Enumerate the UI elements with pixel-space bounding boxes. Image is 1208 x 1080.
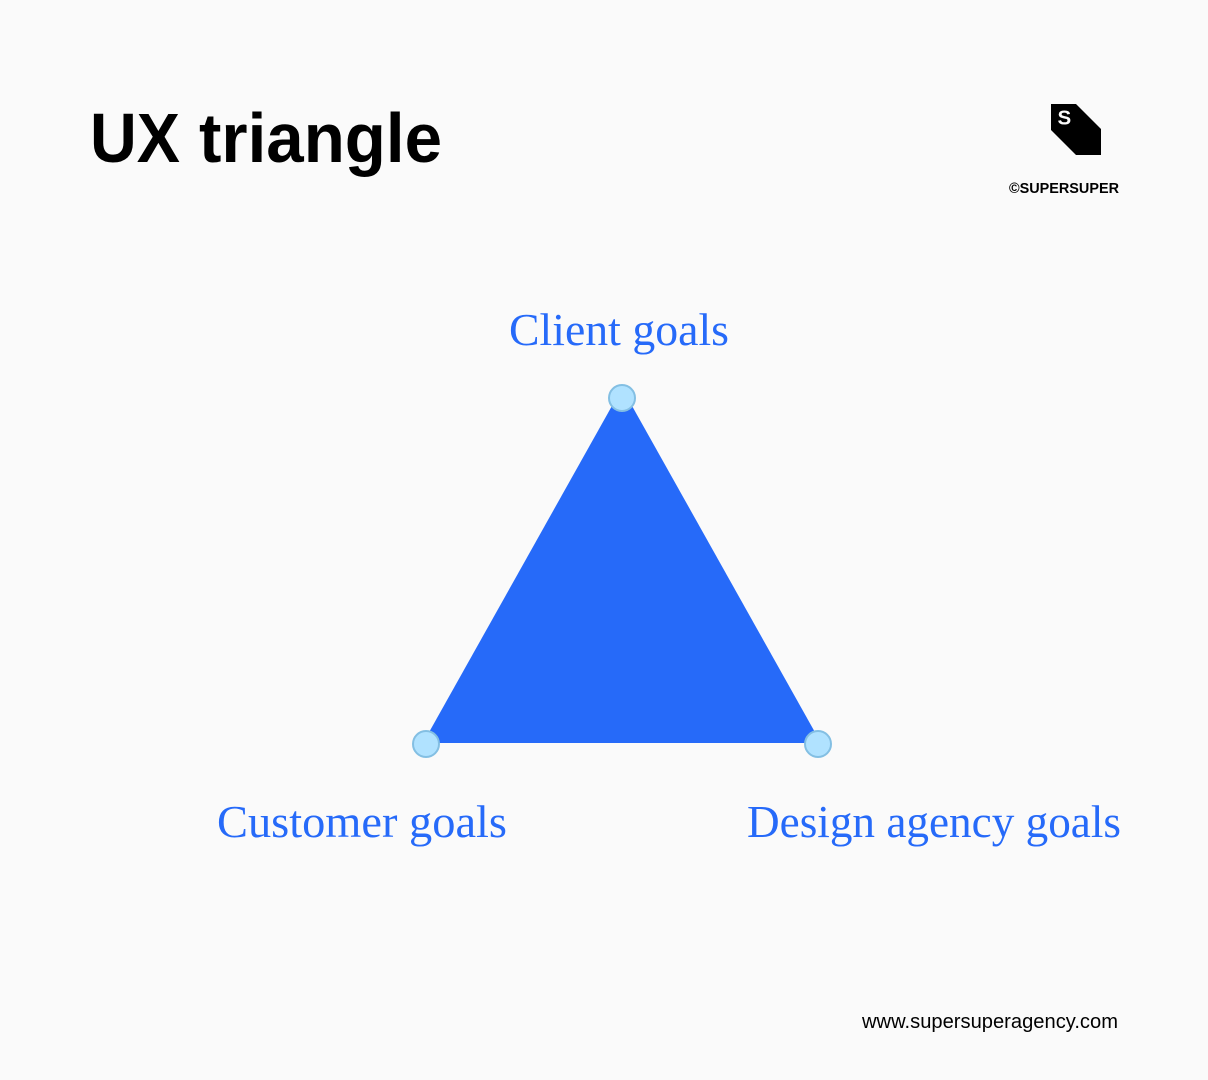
triangle diagram: [413, 385, 831, 757]
icon: tag shape: [1051, 104, 1101, 155]
label: client goals: Client goals: [509, 304, 729, 355]
logo wordmark: ©SUPERSUPER: [1009, 180, 1119, 197]
triangle: [423, 388, 821, 743]
title: [90, 99, 442, 177]
node: design agency goals: [805, 731, 831, 757]
website url: www.supersuperagency.com: [861, 1011, 1118, 1033]
node: customer goals: [413, 731, 439, 757]
node: client goals: [609, 385, 635, 411]
title: triangle: [199, 99, 442, 177]
logo: Supersuper brand: [1009, 104, 1119, 197]
label: customer goals: Customer goals: [217, 796, 507, 847]
label: design agency goals: Design agency goals: [747, 796, 1121, 847]
title: UX: [90, 99, 180, 177]
icon: letter S: S: [1058, 106, 1071, 130]
